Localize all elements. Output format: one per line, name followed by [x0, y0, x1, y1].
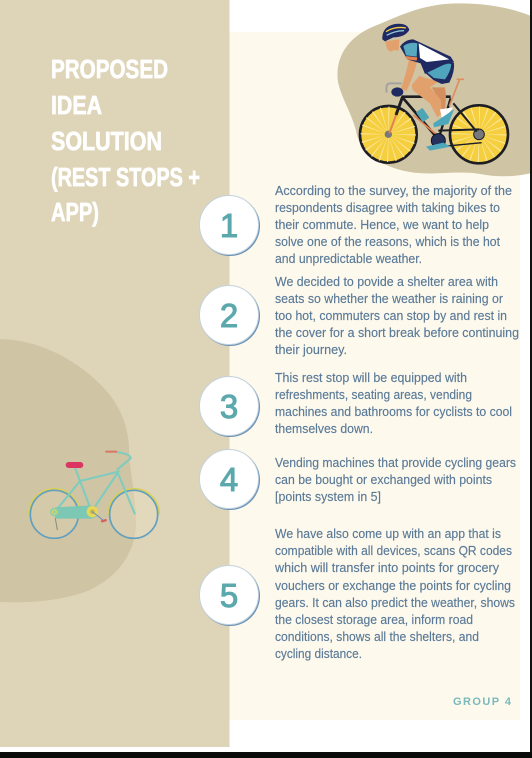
title: PROPOSED: [51, 56, 168, 84]
number badge 4: 4: [220, 461, 238, 498]
text block 2: too hot, commuters can stop by and rest in: [275, 308, 507, 323]
text block 3: This rest stop will be equipped with: [275, 370, 467, 385]
icon: road cyclist on yellow-wheeled bicycle: [360, 24, 508, 163]
number badge 2: [200, 286, 260, 346]
text block 1: According to the survey, the majority of the: [275, 183, 512, 198]
right screen edge: [530, 0, 532, 758]
icon: teal city bicycle: [29, 451, 159, 538]
title: [51, 56, 200, 227]
text block 2: seats so whether the weather is raining or: [275, 291, 504, 306]
text block 3: [275, 370, 512, 436]
text block 4: [points system in 5]: [275, 489, 381, 504]
text block 1: [275, 183, 512, 266]
text block 4: [275, 455, 516, 504]
text block 3: machines and bathrooms for cyclists to cool: [275, 404, 512, 419]
text block 2: the cover for a short break before continuing: [275, 325, 519, 340]
shorts: [425, 62, 454, 84]
text block 5: [274, 526, 515, 661]
number badge 1: [200, 196, 260, 256]
text block 2: [275, 274, 519, 357]
text block 1: their commute. Hence, we want to help: [275, 217, 489, 232]
blob: behind city bicycle: [0, 339, 136, 602]
front leg: [412, 76, 442, 117]
title: IDEA: [51, 92, 102, 120]
text block 4: Vending machines that provide cycling gears: [275, 455, 516, 470]
number badge 4: [200, 450, 260, 510]
number badge 2: 2: [220, 297, 238, 334]
number badge 1: 1: [220, 207, 238, 244]
text block 3: refreshments, seating areas, vending: [275, 387, 472, 402]
text block 1: respondents disagree with taking bikes to: [275, 200, 500, 215]
panel: tan sidebar: [0, 0, 230, 747]
number badge 5: 5: [220, 577, 238, 614]
arm: [401, 57, 417, 91]
text block 5: We have also come up with an app that is: [275, 526, 501, 541]
number badge 5: [200, 566, 260, 626]
jersey: [400, 39, 454, 74]
text block 3: themselves down.: [275, 421, 373, 436]
text block 2: their journey.: [275, 342, 347, 357]
number badge 3: 3: [220, 388, 238, 425]
text block 5: conditions, shows all the shelters, and: [275, 629, 479, 644]
title: SOLUTION: [51, 128, 162, 156]
text block 5: the closest storage area, inform road: [275, 612, 473, 627]
text block 5: vouchers or exchange the points for cycling: [275, 578, 511, 593]
blob: behind cyclist: [337, 3, 531, 176]
panel: cream content background: [229, 32, 520, 720]
text block 5: which will transfer into points for grocery: [274, 560, 499, 575]
text block 5: cycling distance.: [275, 646, 362, 661]
text block 1: and unpredictable weather.: [275, 251, 422, 266]
text block 5: compatible with all devices, scans QR codes: [275, 543, 512, 558]
rear leg: [432, 87, 446, 117]
text block 5: gears. It can also predict the weather, shows: [275, 595, 515, 610]
text block 1: solve one of the reasons, which is the hot: [275, 234, 500, 249]
bottom screen edge: [0, 752, 532, 758]
head: [385, 39, 399, 52]
number badge 3: [200, 376, 260, 437]
text block 2: We decided to povide a shelter area with: [275, 274, 498, 289]
group label: GROUP 4: [453, 696, 512, 708]
title: APP): [51, 199, 99, 227]
title: (REST STOPS +: [51, 164, 200, 192]
text block 4: can be bought or exchanged with points: [275, 472, 492, 487]
